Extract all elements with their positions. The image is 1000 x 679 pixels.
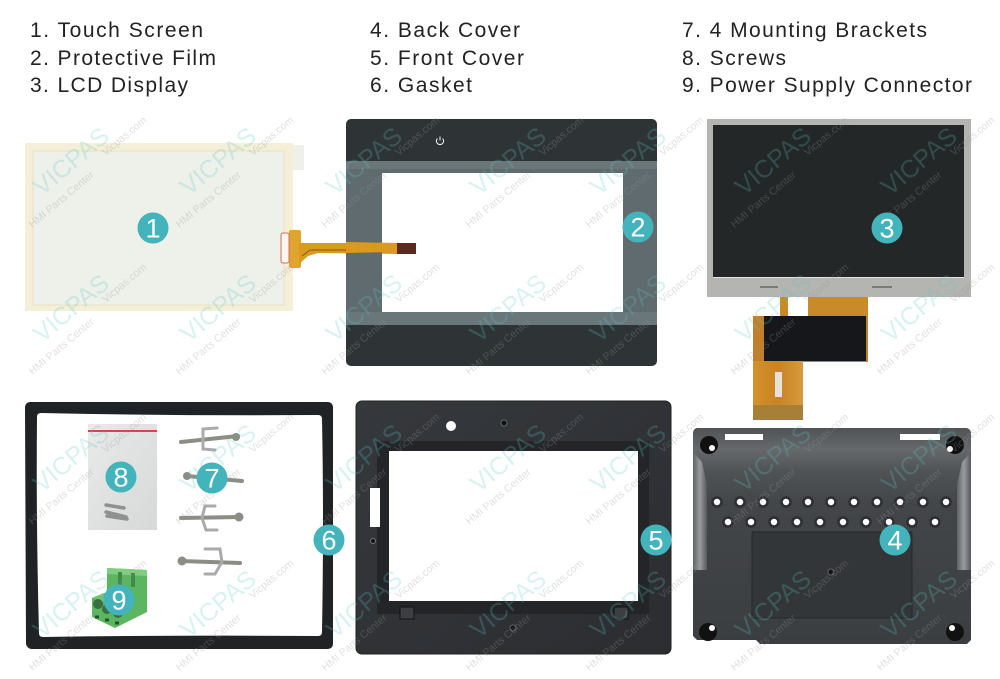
watermark grid: HMI Parts Center	[875, 316, 945, 377]
watermark grid: VICPAS	[876, 419, 963, 498]
watermark grid: HMI Parts Center	[320, 316, 390, 377]
badge 6	[314, 524, 344, 556]
watermark grid: Vicpas.com	[100, 557, 149, 601]
heading list: parts 7 to 9: 9. Power Supply Connector	[682, 74, 972, 97]
watermark grid: VICPAS	[730, 419, 817, 498]
watermark grid: Vicpas.com	[657, 411, 706, 455]
watermark grid: HMI Parts Center	[174, 316, 244, 377]
badge 5	[640, 524, 672, 556]
badge 9	[104, 584, 134, 616]
watermark grid: HMI Parts Center	[464, 612, 534, 673]
watermark grid: Vicpas.com	[802, 114, 851, 158]
ventilation holes	[712, 498, 950, 526]
watermark grid: VICPAS	[465, 269, 552, 348]
watermark grid: Vicpas.com	[802, 557, 851, 601]
watermark grid: HMI Parts Center	[584, 466, 654, 527]
panel: gasket	[25, 402, 333, 649]
watermark grid: HMI Parts Center	[464, 466, 534, 527]
watermark grid: VICPAS	[321, 269, 408, 348]
watermark grid: VICPAS	[28, 565, 115, 644]
watermark grid: VICPAS	[876, 565, 963, 644]
watermark grid: Vicpas.com	[537, 114, 586, 158]
watermark grid: Vicpas.com	[802, 261, 851, 305]
watermark grid: Vicpas.com	[393, 557, 442, 601]
watermark grid: VICPAS	[321, 122, 408, 201]
badge 9: 9	[111, 586, 127, 616]
panel: protective film	[346, 119, 657, 366]
watermark grid: VICPAS	[585, 419, 672, 498]
icon: power symbol	[436, 136, 444, 145]
icon: power supply connector	[92, 568, 147, 628]
watermark grid: Vicpas.com	[657, 114, 706, 158]
watermark grid: Vicpas.com	[537, 557, 586, 601]
watermark grid: Vicpas.com	[100, 261, 149, 305]
watermark grid: VICPAS	[28, 269, 115, 348]
heading list: parts 4 to 6: 6. Gasket	[370, 74, 472, 97]
watermark grid: VICPAS	[175, 565, 262, 644]
watermark grid: VICPAS	[28, 122, 115, 201]
watermark grid: VICPAS	[321, 565, 408, 644]
watermark grid: Vicpas.com	[948, 411, 997, 455]
watermark grid: HMI Parts Center	[729, 316, 799, 377]
watermark grid: HMI Parts Center	[584, 612, 654, 673]
heading list: parts 1 to 3: 3. LCD Display	[30, 74, 188, 97]
badge 4: 4	[887, 526, 903, 556]
watermark grid: HMI Parts Center	[729, 612, 799, 673]
watermark grid: VICPAS	[730, 269, 817, 348]
watermark grid: VICPAS	[730, 122, 817, 201]
watermark grid: Vicpas.com	[657, 557, 706, 601]
watermark grid: VICPAS	[585, 122, 672, 201]
badge 7	[196, 462, 228, 494]
watermark grid: HMI Parts Center	[320, 169, 390, 230]
watermark grid: Vicpas.com	[948, 557, 997, 601]
watermark grid: Vicpas.com	[100, 114, 149, 158]
heading list: parts 7 to 9: 8. Screws	[682, 47, 786, 70]
badge 3: 3	[879, 214, 895, 244]
watermark grid: Vicpas.com	[100, 411, 149, 455]
heading list: parts 4 to 6: 4. Back Cover	[370, 19, 520, 42]
watermark grid: Vicpas.com	[247, 261, 296, 305]
badge 1	[138, 212, 168, 244]
heading list: parts 1 to 3	[30, 19, 216, 97]
watermark grid: VICPAS	[585, 269, 672, 348]
watermark grid: VICPAS	[28, 419, 115, 498]
watermark grid: HMI Parts Center	[27, 316, 97, 377]
watermark grid: HMI Parts Center	[174, 169, 244, 230]
badge 3	[872, 212, 902, 244]
watermark grid: HMI Parts Center	[729, 466, 799, 527]
watermark grid: VICPAS	[585, 565, 672, 644]
watermark grid: Vicpas.com	[247, 411, 296, 455]
heading list: parts 4 to 6	[370, 19, 524, 97]
watermark grid: HMI Parts Center	[27, 466, 97, 527]
badge 2: 2	[630, 212, 646, 242]
icon: mounting brackets	[178, 428, 244, 574]
watermark grid: VICPAS	[876, 269, 963, 348]
watermark grid: VICPAS	[175, 122, 262, 201]
watermark grid: HMI Parts Center	[729, 169, 799, 230]
watermark grid: Vicpas.com	[657, 261, 706, 305]
watermark grid: Vicpas.com	[247, 557, 296, 601]
badge 1: 1	[145, 214, 161, 244]
badge 8: 8	[113, 462, 129, 492]
panel: back cover	[693, 428, 971, 644]
watermark grid: VICPAS	[321, 419, 408, 498]
panel: touch screen	[25, 143, 416, 311]
watermark grid: Vicpas.com	[537, 411, 586, 455]
heading list: parts 4 to 6: 5. Front Cover	[370, 47, 524, 70]
badge 2	[622, 212, 654, 242]
icon: screw bag	[88, 424, 157, 530]
watermark grid: HMI Parts Center	[875, 466, 945, 527]
watermark grid: Vicpas.com	[393, 261, 442, 305]
watermark grid: Vicpas.com	[247, 114, 296, 158]
badge 5: 5	[648, 526, 664, 556]
badge 6: 6	[321, 526, 337, 556]
watermark grid: HMI Parts Center	[320, 466, 390, 527]
watermark grid: VICPAS	[465, 565, 552, 644]
badge 7: 7	[204, 464, 220, 494]
heading list: parts 7 to 9: 7. 4 Mounting Brackets	[682, 19, 927, 42]
watermark grid: Vicpas.com	[948, 261, 997, 305]
panel: front cover	[356, 401, 671, 654]
watermark grid: Vicpas.com	[537, 261, 586, 305]
watermark grid: HMI Parts Center	[875, 612, 945, 673]
watermark grid: VICPAS	[876, 122, 963, 201]
icon: mounting hole	[446, 421, 456, 431]
badge 8	[106, 462, 136, 492]
watermark grid: HMI Parts Center	[174, 612, 244, 673]
heading list: parts 7 to 9	[682, 19, 972, 97]
heading list: parts 1 to 3: 1. Touch Screen	[30, 19, 203, 42]
watermark grid: HMI Parts Center	[875, 169, 945, 230]
watermark grid: HMI Parts Center	[464, 316, 534, 377]
watermark grid: Vicpas.com	[393, 114, 442, 158]
watermark grid: HMI Parts Center	[27, 612, 97, 673]
watermark grid: VICPAS	[730, 565, 817, 644]
watermark grid: HMI Parts Center	[174, 466, 244, 527]
watermark grid: Vicpas.com	[802, 411, 851, 455]
heading list: parts 1 to 3: 2. Protective Film	[30, 47, 216, 70]
watermark grid: Vicpas.com	[393, 411, 442, 455]
watermark grid: VICPAS	[465, 122, 552, 201]
watermark grid: VICPAS	[175, 419, 262, 498]
watermark grid: VICPAS	[465, 419, 552, 498]
watermark grid: HMI Parts Center	[584, 169, 654, 230]
watermark grid: VICPAS	[175, 269, 262, 348]
panel: LCD display	[707, 119, 971, 420]
watermark grid: HMI Parts Center	[27, 169, 97, 230]
watermark grid: HMI Parts Center	[464, 169, 534, 230]
watermark grid: HMI Parts Center	[584, 316, 654, 377]
watermark grid: HMI Parts Center	[320, 612, 390, 673]
watermark grid: Vicpas.com	[948, 114, 997, 158]
badge 4	[880, 524, 910, 556]
